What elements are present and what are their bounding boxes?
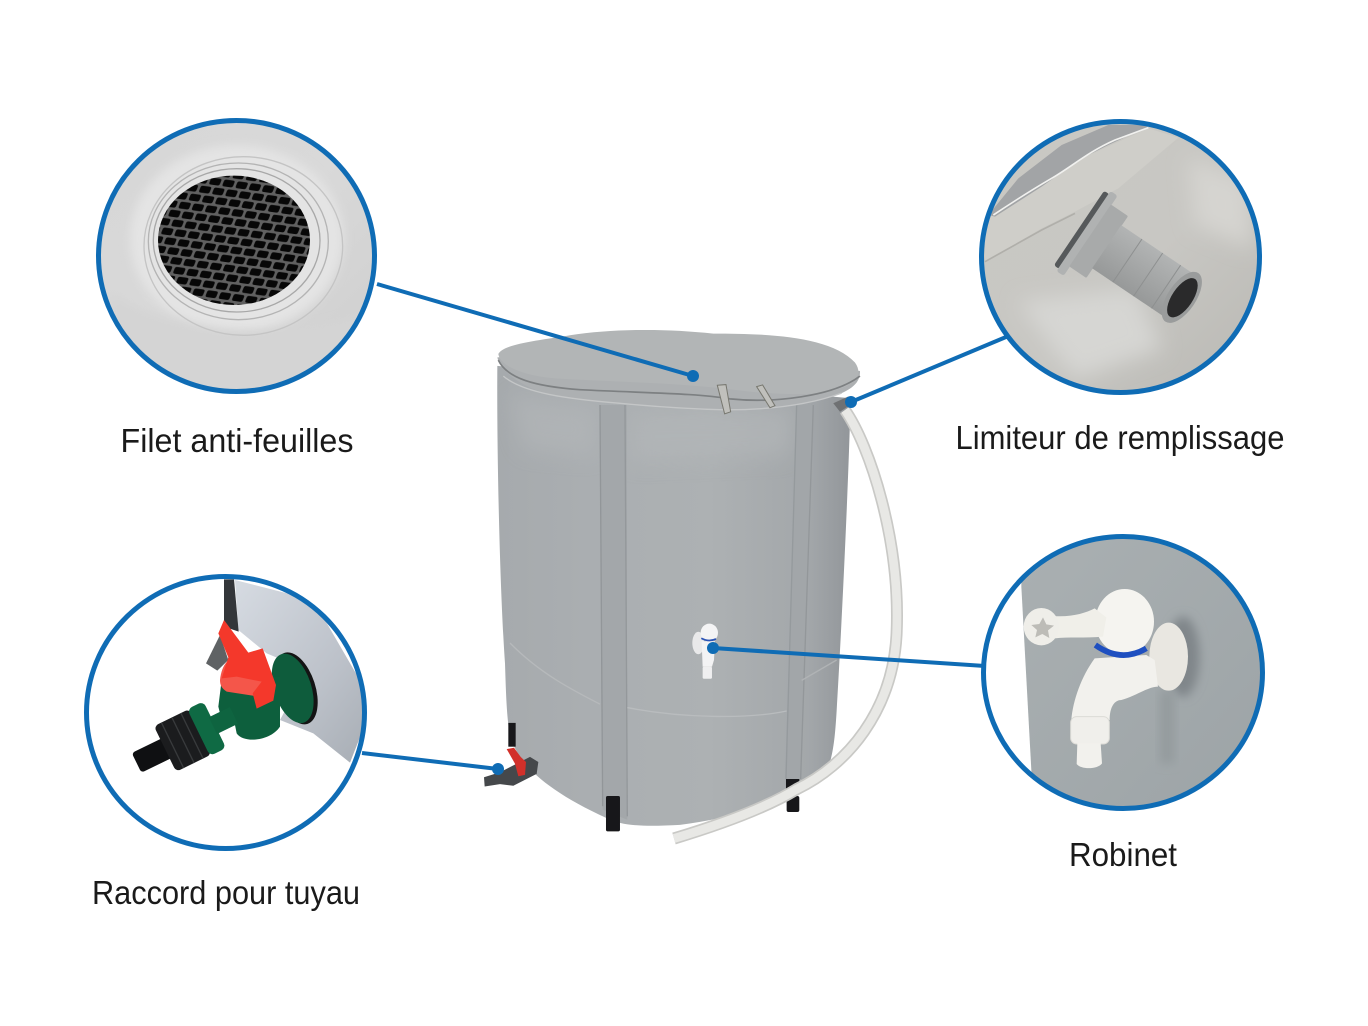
overflow hose (674, 410, 897, 838)
hose fitting (1054, 192, 1202, 323)
hose fitting (833, 396, 853, 412)
main product: rain barrel (484, 330, 897, 838)
detail circle: fill limiter (975, 115, 1270, 400)
flange (282, 652, 318, 724)
zip band under lid (497, 354, 860, 411)
label: tap: Robinet (1069, 836, 1177, 873)
collar and nozzle (1071, 717, 1109, 744)
callout: tap (707, 642, 985, 666)
connector parts (132, 703, 235, 772)
zipper pulls (717, 385, 775, 414)
tank wall (1021, 539, 1260, 806)
right rear foot (787, 796, 799, 812)
small hose connector on barrel (484, 748, 538, 786)
body shading and seams (510, 395, 837, 820)
label: hose connector: Raccord pour tuyau (92, 874, 360, 911)
red handle (218, 620, 276, 709)
label: fill limiter: Limiteur de remplissage (956, 419, 1284, 456)
lever (1055, 608, 1099, 638)
barrel body (497, 366, 851, 826)
shadows (1166, 617, 1200, 697)
callout: fill limiter (845, 337, 1006, 408)
strap (224, 579, 239, 632)
spout (1071, 655, 1158, 720)
valve body (218, 686, 280, 740)
red cap (220, 661, 262, 696)
callout: anti-leaf net (377, 284, 699, 382)
barrel front feet (508, 723, 799, 831)
small tap on barrel (692, 624, 718, 679)
tank wall (235, 580, 373, 763)
blue band (1095, 645, 1146, 655)
label: anti-leaf net: Filet anti-feuilles (120, 422, 354, 459)
head (1095, 589, 1154, 654)
callout: hose connector (362, 753, 504, 775)
backplate (1149, 623, 1188, 691)
mesh zip (988, 125, 1152, 217)
barrel lid (498, 330, 858, 394)
detail circle: hose connector (80, 570, 375, 855)
detail circle: anti-leaf net (90, 112, 385, 397)
fold under zip (985, 128, 1178, 262)
detail circle: tap (978, 530, 1273, 817)
